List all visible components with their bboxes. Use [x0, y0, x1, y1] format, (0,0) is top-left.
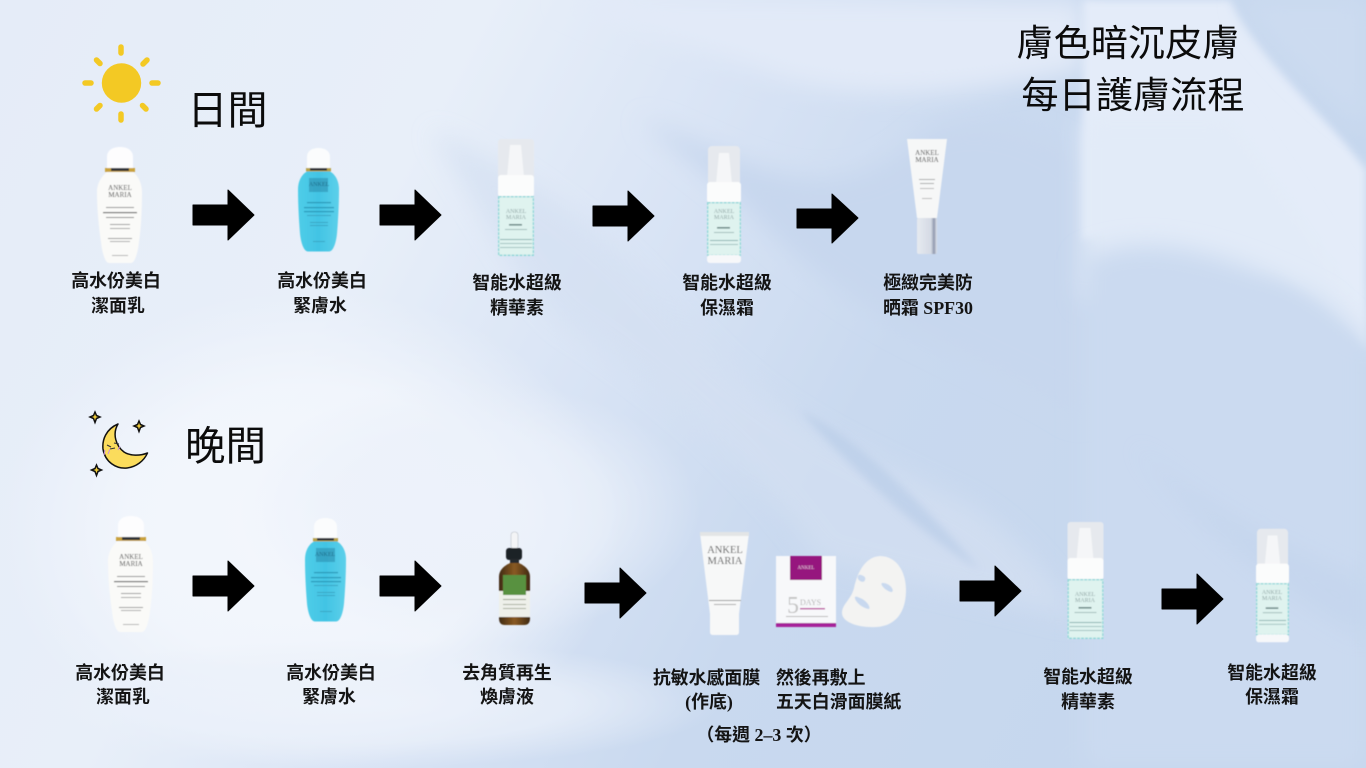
arrow — [380, 190, 441, 240]
night label: cleanser: 高水份美白 — [75, 662, 165, 683]
day label: cleanser — [71, 270, 161, 316]
night label: frequency: （每週 2–3 次） — [696, 725, 822, 745]
icon: crescent moon with stars — [90, 412, 148, 476]
day product: whitening cleanser: MARIA — [108, 191, 132, 199]
night product: moisturiser: ANKEL — [1262, 590, 1282, 596]
night product: whitening toner: ANKEL — [315, 552, 335, 558]
day product: whitening toner — [298, 148, 339, 252]
arrow — [797, 194, 858, 243]
day label: moisturiser — [682, 272, 772, 318]
night label: 5 days sheet mask — [776, 667, 901, 712]
day label: moisturiser: 保濕霜 — [700, 298, 754, 318]
icon: sun — [85, 47, 158, 120]
day product: moisturiser: MARIA — [714, 215, 735, 221]
night label: serum: 智能水超級 — [1043, 666, 1133, 687]
night product: hydrating mask tube: MARIA — [707, 556, 743, 567]
arrow — [1162, 574, 1223, 624]
night label: cleanser — [75, 662, 165, 707]
night label: hydrating mask base: (作底) — [685, 691, 733, 713]
night label: exfoliator: 去角質再生 — [462, 663, 552, 683]
night product: whitening cleanser — [108, 516, 153, 632]
day product: moisturiser: ANKEL — [714, 209, 734, 215]
day product: whitening toner: ANKEL — [309, 182, 329, 188]
night product: hydrating mask tube: ANKEL — [707, 545, 743, 556]
day label: serum — [472, 272, 562, 318]
day label: toner: 緊膚水 — [293, 296, 347, 316]
night label: toner: 緊膚水 — [302, 687, 356, 707]
night product: serum: MARIA — [1075, 598, 1096, 604]
night label: hydrating mask base: 抗敏水感面膜 — [653, 667, 760, 688]
heading: day: 日間 — [188, 89, 268, 133]
day label: sunscreen — [883, 272, 973, 318]
night product: 5 days mask box: DAYS — [800, 598, 821, 607]
night product: whitening toner — [305, 518, 346, 622]
night product: 5 days mask box — [776, 556, 836, 627]
night product: serum: ANKEL — [1075, 592, 1095, 598]
night label: cleanser: 潔面乳 — [96, 687, 150, 707]
day label: cleanser: 潔面乳 — [91, 296, 145, 316]
night label: 5 days sheet mask: 五天白滑面膜紙 — [776, 691, 901, 712]
arrow — [960, 566, 1021, 616]
night label: moisturiser: 保濕霜 — [1245, 687, 1299, 707]
night product: whitening cleanser: MARIA — [119, 560, 143, 568]
night label: serum — [1043, 666, 1133, 712]
night label: toner: 高水份美白 — [286, 662, 376, 683]
day product: whitening cleanser — [97, 147, 142, 263]
night label: exfoliator — [462, 663, 552, 707]
day product: serum: MARIA — [506, 215, 527, 221]
day label: serum: 智能水超級 — [472, 272, 562, 293]
night label: exfoliator: 煥膚液 — [480, 687, 534, 707]
day product: serum: ANKEL — [506, 209, 526, 215]
night label: moisturiser — [1227, 662, 1317, 707]
day label: sunscreen: 極緻完美防 — [883, 272, 973, 293]
night label: serum: 精華素 — [1061, 692, 1115, 712]
arrow — [193, 561, 254, 611]
night product: sheet mask — [842, 556, 906, 627]
night product: whitening cleanser: ANKEL — [119, 553, 143, 561]
night label: hydrating mask base — [653, 667, 760, 713]
night product: moisturiser: MARIA — [1262, 596, 1283, 602]
title — [1016, 22, 1245, 116]
title: 膚色暗沉皮膚 — [1016, 22, 1240, 64]
day label: sunscreen: 晒霜 SPF30 — [883, 298, 973, 318]
night product: moisturiser — [1256, 529, 1289, 642]
day product: serum — [498, 139, 534, 256]
night product: hydrating mask tube — [700, 532, 749, 635]
day product: sunscreen tube — [907, 139, 947, 254]
arrow — [593, 191, 654, 241]
day label: toner — [277, 270, 367, 316]
day product: sunscreen tube: ANKEL — [915, 149, 939, 157]
day product: whitening cleanser: ANKEL — [108, 184, 132, 192]
night product: serum — [1068, 522, 1104, 639]
title: 每日護膚流程 — [1021, 74, 1245, 116]
day product: moisturiser — [707, 146, 741, 263]
arrow — [585, 568, 646, 618]
arrow — [380, 561, 441, 611]
heading: night: 晚間 — [185, 423, 266, 469]
night product: 5 days mask box: 5 — [787, 593, 799, 619]
arrow — [193, 190, 254, 240]
night product: exfoliating dropper bottle — [499, 532, 530, 625]
day product: sunscreen tube: MARIA — [915, 156, 939, 164]
night label: moisturiser: 智能水超級 — [1227, 662, 1317, 683]
day label: serum: 精華素 — [490, 298, 544, 318]
night product: 5 days mask box: ANKEL — [798, 566, 814, 571]
day label: cleanser: 高水份美白 — [71, 270, 161, 291]
day label: toner: 高水份美白 — [277, 270, 367, 291]
night label: 5 days sheet mask: 然後再敷上 — [776, 667, 866, 688]
day label: moisturiser: 智能水超級 — [682, 272, 772, 293]
night label: toner — [286, 662, 376, 707]
